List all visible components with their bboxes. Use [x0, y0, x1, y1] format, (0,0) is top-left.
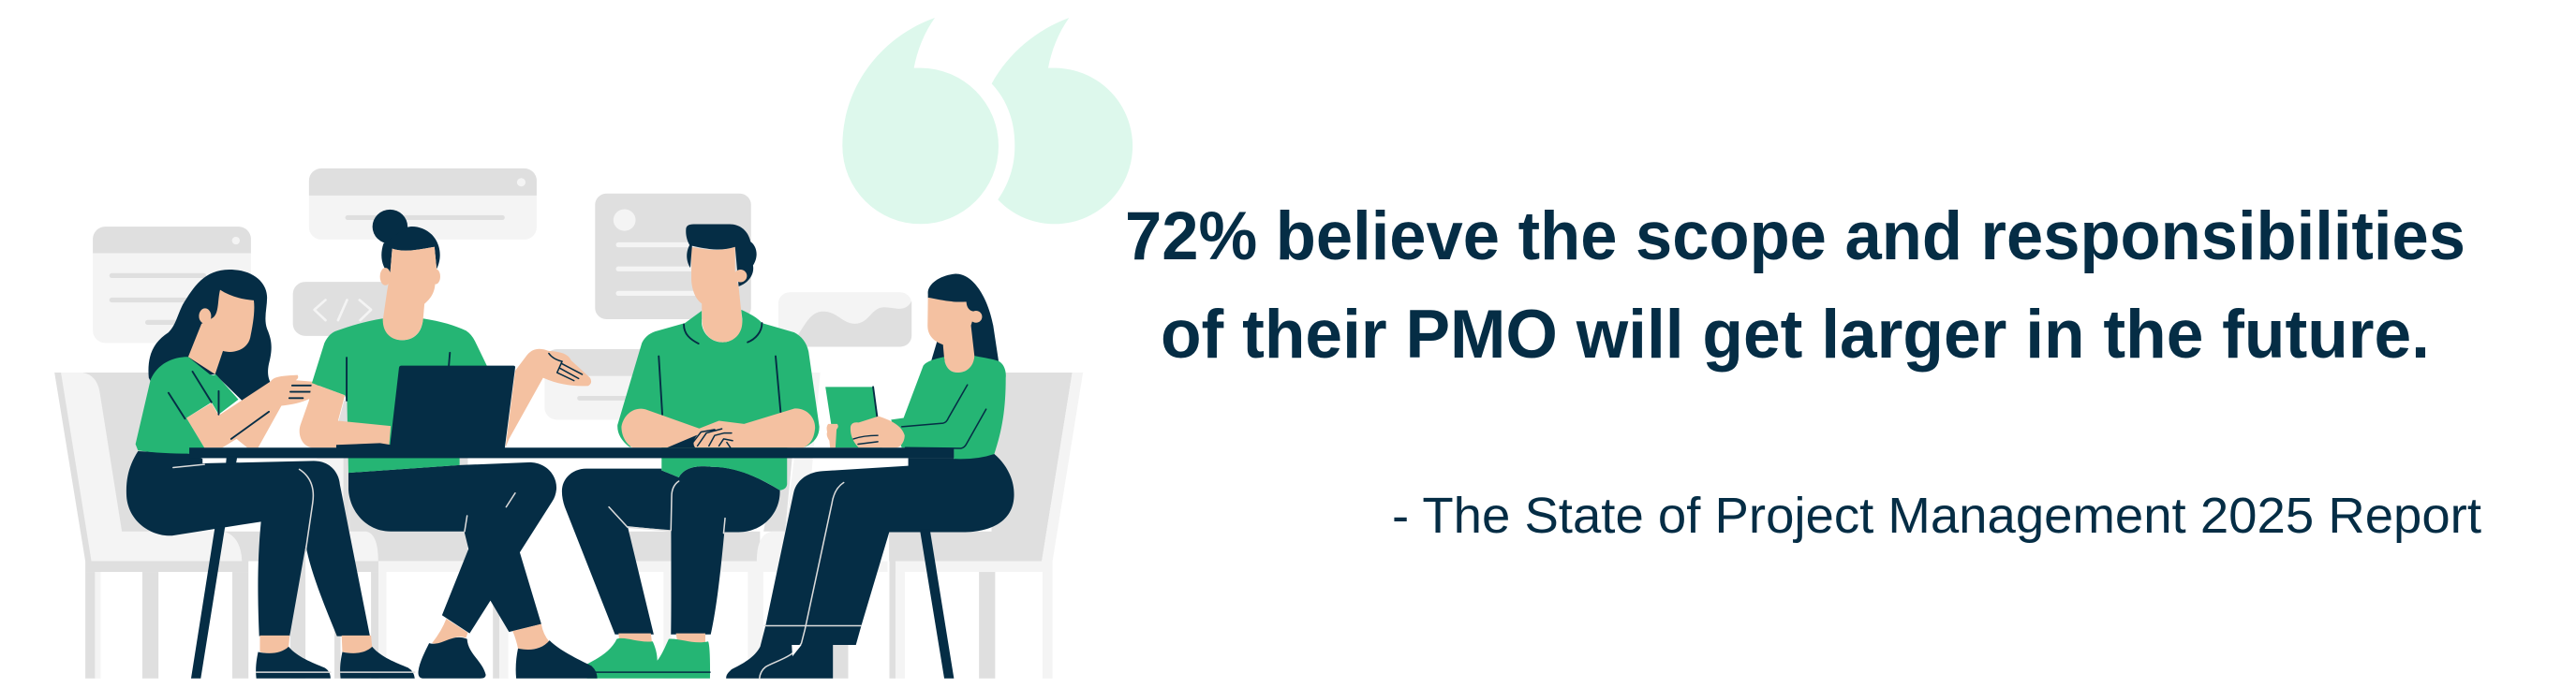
table and laptop	[189, 366, 954, 679]
person: man with hoodie	[562, 225, 820, 679]
left arm	[300, 383, 391, 447]
head and neck	[188, 290, 254, 374]
head	[686, 225, 757, 343]
table leg: left	[191, 526, 225, 679]
sweater	[891, 356, 1006, 459]
green shoes	[587, 634, 710, 679]
icon: quotation marks	[842, 18, 1133, 224]
illustration: team meeting around a table	[54, 168, 1083, 679]
person: woman with hair bun	[300, 210, 598, 679]
arms and hands	[621, 408, 815, 447]
window: area chart panel	[778, 292, 911, 346]
window: code panel	[293, 282, 393, 336]
hair	[148, 270, 272, 401]
hair	[928, 273, 999, 361]
tablet	[825, 387, 882, 447]
window: top panel	[309, 168, 537, 240]
window: bottom message panel	[544, 349, 645, 419]
shirt	[136, 357, 318, 454]
trousers	[726, 454, 1014, 679]
forearm and hand	[186, 375, 321, 447]
background interface windows	[93, 168, 911, 419]
chairs	[54, 373, 1083, 679]
shoes	[419, 619, 598, 679]
headline statistic: 72% believe the scope and responsibilities	[1125, 198, 2465, 274]
hands	[827, 417, 905, 447]
person: woman with long hair	[126, 270, 415, 679]
table connector	[226, 457, 237, 464]
window: left text panel	[93, 227, 251, 343]
hoodie	[617, 310, 820, 490]
quote text	[1125, 198, 2481, 544]
trousers	[562, 466, 780, 635]
head and neck	[927, 298, 982, 373]
source attribution: - The State of Project Management 2025 Report	[1392, 488, 2481, 544]
table top	[189, 447, 954, 458]
head and hair	[373, 210, 440, 340]
table leg: right	[920, 530, 954, 679]
trousers	[126, 451, 370, 637]
trousers	[348, 462, 556, 634]
shoes	[256, 636, 415, 679]
chair: right	[833, 373, 1083, 679]
chair: third	[629, 373, 888, 679]
window: profile panel	[595, 194, 751, 319]
shirt	[312, 318, 487, 473]
chair: left	[54, 373, 305, 679]
chair: second	[316, 457, 509, 679]
person: woman with tablet	[726, 273, 1014, 679]
laptop	[336, 366, 515, 448]
right arm and hand	[506, 349, 591, 447]
headline second line: of their PMO will get larger in the future.	[1161, 297, 2430, 373]
